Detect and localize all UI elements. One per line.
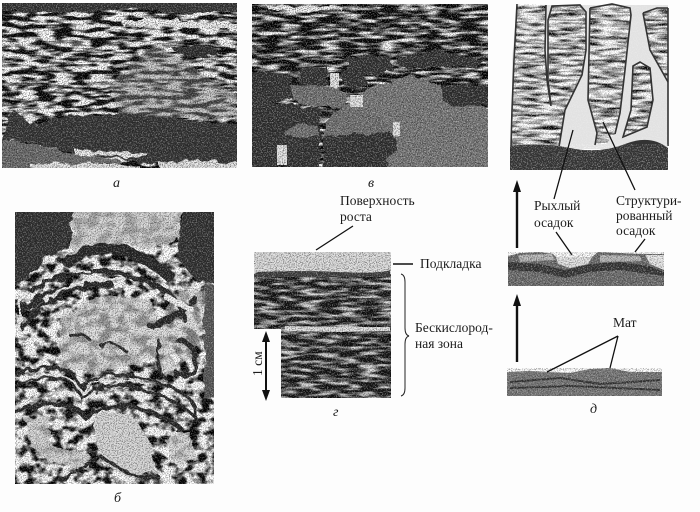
pale band (285, 326, 390, 332)
label: anoxic zone with brace: Бескислород- (415, 320, 493, 335)
arrow up to top stage (513, 180, 521, 248)
pale boulders bottom (95, 412, 153, 478)
dark upper edge (2, 3, 237, 15)
dark upper layer (508, 262, 664, 278)
label: anoxic zone with brace (401, 274, 493, 396)
label: loose sediment: Рыхлый (534, 198, 580, 213)
structured columns (508, 2, 670, 150)
label: growth surface: Поверхность (340, 193, 415, 208)
pale sediment pockets (556, 257, 592, 268)
photo v: columnar stromatolites (250, 4, 490, 170)
photo g: mat section (254, 252, 391, 398)
diagram d top: columnar stage (508, 2, 670, 170)
mid grey column tops (285, 84, 392, 138)
lower grey (0, 140, 120, 170)
photo a: mat surface (0, 0, 240, 170)
pale centre (60, 295, 165, 372)
dark base (510, 140, 668, 170)
label v: в (368, 176, 374, 191)
pale top layer (254, 252, 391, 274)
diagram d middle: sediment-trapping stage (508, 252, 664, 286)
diagram d bottom: flat mat stage (507, 368, 662, 396)
label: mat (547, 315, 637, 372)
scale arrow 1 cm: 1 см (250, 351, 265, 376)
label: structured sediment (603, 122, 682, 252)
label: structured sediment: осадок (616, 223, 656, 238)
mid-grey mound (110, 44, 237, 118)
label: loose sediment (534, 130, 580, 255)
dark lower tone (254, 275, 391, 398)
label: mat: Мат (613, 315, 637, 330)
label g: г (333, 405, 339, 420)
white cavity (170, 353, 181, 365)
dark top corners (15, 212, 74, 286)
white laminae (15, 270, 192, 392)
label d: д (590, 402, 597, 417)
label a: а (113, 176, 120, 191)
column outlines (511, 4, 668, 147)
scale arrow 1 cm (250, 331, 270, 401)
label: anoxic zone with brace: ная зона (415, 336, 463, 351)
light gaps (277, 73, 400, 165)
white top stripe (266, 5, 340, 12)
lower right grey field (340, 76, 490, 170)
label: growth surface: роста (340, 209, 372, 224)
pale upper block (72, 205, 184, 252)
label: underlayer (393, 256, 481, 271)
dark thin line at layer top (254, 270, 390, 277)
label: growth surface (316, 193, 415, 250)
label: loose sediment: осадок (534, 215, 574, 230)
label: structured sediment: рованный (616, 208, 672, 223)
dark columns (250, 50, 490, 170)
dark laminae arches (15, 248, 200, 480)
label b: б (114, 491, 122, 506)
white stripes (75, 149, 147, 157)
loose sediment (512, 5, 668, 150)
label: structured sediment: Структури- (616, 193, 682, 208)
photo b: stromatolite section (10, 205, 220, 484)
dark foreground band (3, 108, 240, 164)
arrow up to middle stage (513, 294, 521, 362)
white band (120, 20, 240, 30)
dark slab upper right (170, 46, 218, 57)
label: underlayer: Подкладка (420, 256, 481, 271)
